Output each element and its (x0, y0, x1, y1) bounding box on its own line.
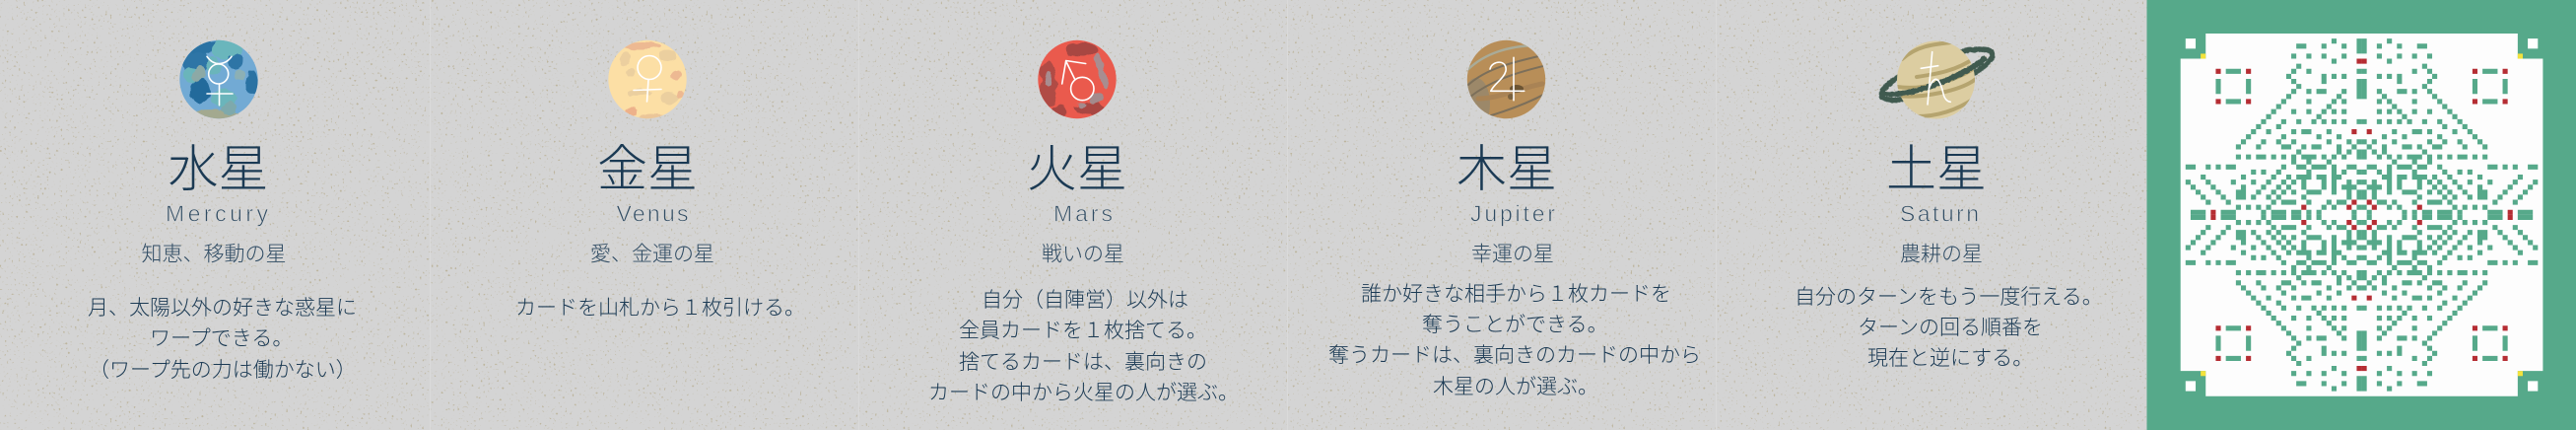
top-left quadrant modules (2186, 38, 2362, 212)
body text: 現在と逆にする。 (1867, 347, 2033, 370)
panel: Venus (515, 40, 805, 320)
body text: 誰か好きな相手から１枚カードを (1361, 283, 1671, 306)
body text (928, 289, 1239, 404)
body text: 奪うことができる。 (1422, 314, 1608, 336)
icon: Jupiter planet (1466, 39, 1545, 118)
body text: 木星の人が選ぶ。 (1433, 376, 1598, 398)
panel: Saturn (1795, 39, 2103, 370)
code grid (2181, 34, 2542, 396)
panel: Mars (928, 40, 1239, 404)
body text: （ワープ先の力は働かない） (89, 359, 357, 382)
heading: 金星: 金星 (597, 141, 698, 197)
icon: Saturn planet with ring (1876, 39, 1998, 118)
heading: 水星: 水星 (168, 141, 269, 197)
body text: 自分のターンをもう一度行える。 (1795, 286, 2103, 309)
green frame (2146, 0, 2576, 430)
subtitle: 知恵、移動の星 (142, 243, 286, 266)
heading: 土星: 土星 (1886, 141, 1987, 197)
label: Jupiter: Jupiter (1470, 201, 1555, 227)
panel: Mercury (88, 38, 357, 382)
body text: 月、太陽以外の好きな惑星に (88, 297, 357, 320)
icon: Mercury planet (179, 39, 258, 118)
top-right quadrant modules (2362, 38, 2538, 212)
label: Mars: Mars (1053, 201, 1113, 227)
icon: Mars symbol (1062, 61, 1094, 101)
icon: Saturn symbol (1921, 52, 1950, 105)
panel: Jupiter (1328, 40, 1701, 398)
body text: カードを山札から１枚引ける。 (515, 297, 805, 320)
panel: code pattern (2146, 0, 2576, 430)
body text: 捨てるカードは、裏向きの (959, 351, 1207, 374)
bottom-right quadrant modules (2362, 217, 2538, 392)
body text (88, 297, 357, 382)
icon: Mars planet (1038, 40, 1117, 118)
icon: Venus planet (608, 40, 687, 120)
subtitle: 幸運の星 (1471, 243, 1554, 266)
body text: カードの中から火星の人が選ぶ。 (928, 382, 1239, 404)
label: Saturn: Saturn (1900, 201, 1979, 227)
subtitle: 愛、金運の星 (590, 243, 714, 266)
label: Mercury: Mercury (166, 201, 268, 227)
body text: 自分（自陣営）以外は (982, 289, 1188, 312)
label: Venus: Venus (617, 201, 688, 227)
body text: ワープできる。 (150, 327, 293, 350)
icon: Venus symbol (634, 55, 661, 102)
subtitle: 戦いの星 (1042, 243, 1124, 266)
body text (1795, 286, 2103, 370)
bottom-left quadrant modules (2186, 217, 2362, 392)
icon: Jupiter symbol (1490, 57, 1525, 101)
subtitle: 農耕の星 (1900, 243, 1983, 266)
body text: ターンの回る順番を (1858, 317, 2043, 339)
body text: 奪うカードは、裏向きのカードの中から (1328, 344, 1701, 367)
heading: 火星: 火星 (1027, 141, 1127, 197)
heading: 木星: 木星 (1457, 141, 1557, 197)
white code field (2181, 34, 2542, 396)
body text (1328, 283, 1701, 398)
body text: 全員カードを１枚捨てる。 (959, 320, 1207, 342)
icon: Mercury symbol (207, 56, 233, 106)
